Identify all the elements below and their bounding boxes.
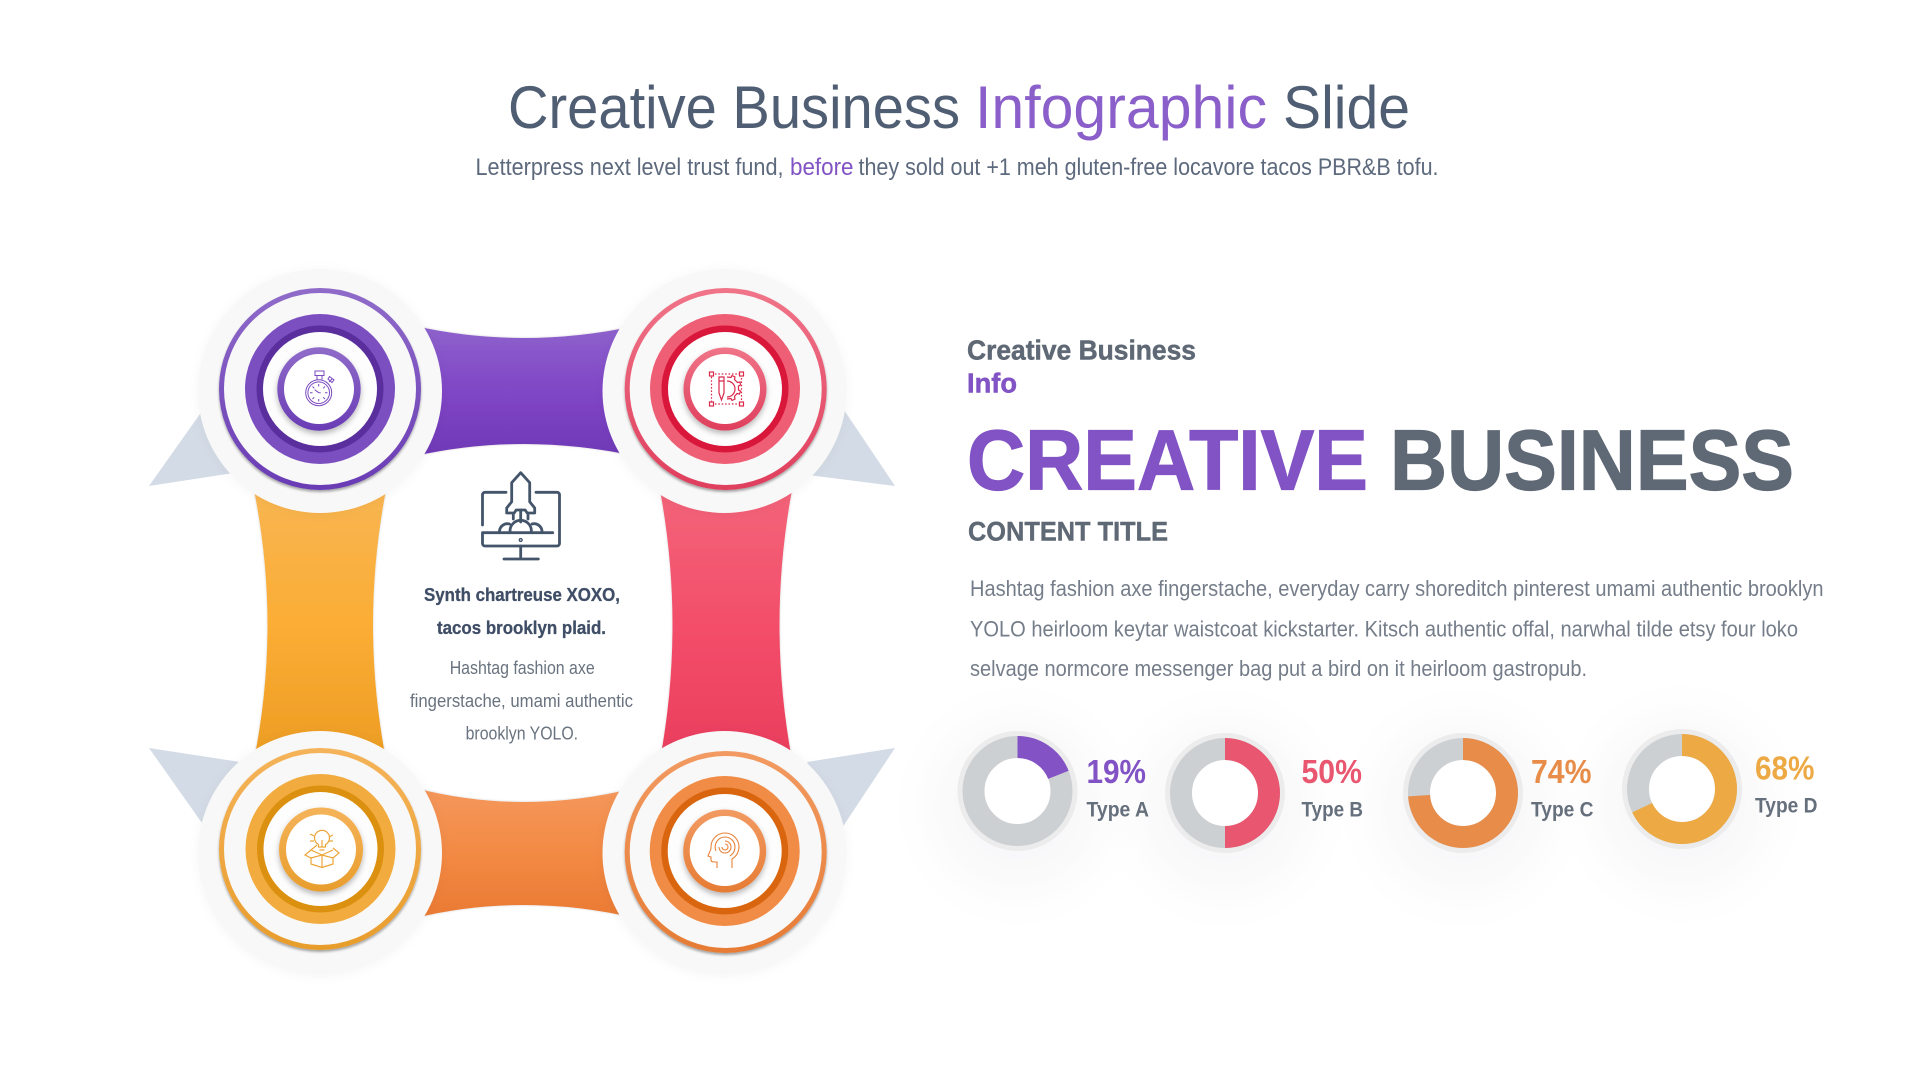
- heading: creative business info: Creative Business: [967, 334, 1196, 366]
- node: gold idea box: [198, 731, 442, 975]
- heading: creative business info: Info: [967, 368, 1017, 398]
- diagram: four-node cycle: [149, 269, 895, 975]
- donut: type B: 50%: [1302, 753, 1362, 790]
- donut: type A: Type A: [1086, 798, 1149, 822]
- icon: lightbulb in box: [305, 830, 339, 868]
- node: orange mind: [602, 731, 846, 975]
- paragraph: selvage normcore messenger bag put a bird on it heirloom gastropub.: [970, 656, 1587, 681]
- paragraph: Hashtag fashion axe fingerstache, everyday carry shoreditch pinterest umami authentic brooklyn: [970, 576, 1824, 601]
- center text block: fingerstache, umami authentic: [410, 691, 633, 711]
- headline: BUSINESS: [1390, 414, 1794, 508]
- center text block: brooklyn YOLO.: [466, 724, 578, 744]
- donut: type D: [1622, 729, 1818, 849]
- arrow: top right: [808, 395, 895, 486]
- center heading: tacos brooklyn plaid.: [437, 617, 606, 638]
- arrow: bottom right: [807, 748, 895, 834]
- heading: creative business info: [967, 334, 1196, 398]
- connector: orange bottom: [415, 788, 635, 918]
- arrow: top left: [149, 397, 240, 486]
- center text block: [410, 658, 633, 744]
- icon: head with maze: [708, 833, 739, 868]
- headline: CREATIVE: [967, 414, 1368, 508]
- donut: type D: 68%: [1755, 750, 1814, 786]
- donut: type A: [958, 731, 1149, 851]
- donut: type C: 74%: [1531, 753, 1592, 790]
- donut: type C: [1403, 733, 1594, 853]
- node: red design tool: [602, 269, 846, 513]
- subtitle: they sold out +1 meh gluten-free locavore tacos PBR&B tofu.: [858, 154, 1438, 181]
- donut: type D: Type D: [1755, 794, 1818, 818]
- paragraph: [970, 576, 1824, 681]
- center heading: [424, 584, 620, 638]
- center heading: Synth chartreuse XOXO,: [424, 584, 620, 605]
- title: Creative Business: [508, 74, 960, 141]
- arrow: bottom left: [149, 748, 240, 840]
- donut: type B: Type B: [1302, 798, 1363, 822]
- paragraph: YOLO heirloom keytar waistcoat kickstarter. Kitsch authentic offal, narwhal tilde etsy four loko: [970, 616, 1798, 642]
- content title: CONTENT TITLE: [968, 516, 1168, 546]
- subtitle: [476, 154, 1438, 181]
- subtitle: Letterpress next level trust fund,: [476, 154, 784, 181]
- title: [508, 74, 1410, 141]
- donut: type C: Type C: [1531, 798, 1594, 822]
- title: Infographic: [975, 74, 1267, 141]
- headline: [967, 414, 1794, 508]
- node: purple stopwatch: [198, 269, 442, 513]
- icon: pencil and gear: [710, 372, 744, 406]
- donut: type B: [1165, 733, 1363, 853]
- center icon: rocket launching from monitor: [482, 473, 560, 559]
- connector: red right: [660, 490, 792, 760]
- icon: stopwatch: [306, 371, 334, 406]
- connector: gold left: [254, 490, 386, 760]
- donut: type A: 19%: [1086, 753, 1146, 790]
- donut shadows: [892, 679, 1807, 933]
- connector: purple top: [415, 326, 635, 456]
- title: Slide: [1283, 74, 1410, 141]
- center text block: Hashtag fashion axe: [450, 658, 595, 678]
- subtitle: before: [790, 154, 854, 181]
